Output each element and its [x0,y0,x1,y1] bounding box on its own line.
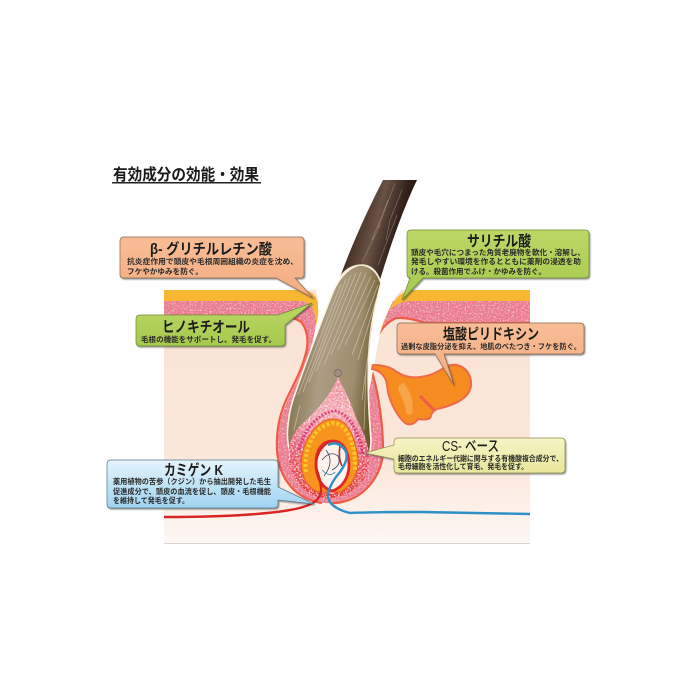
blood vessel: artery [164,441,330,517]
callout: カミゲンK [107,460,314,508]
follicle red outline [277,316,530,503]
capillaries [322,446,342,476]
hair root tan [287,265,381,465]
epidermis and follicle sheath [164,301,530,503]
callout: 塩酸ピリドキシン: 塩酸ピリドキシン [443,325,539,343]
callout: カミゲンK: カミゲン K [164,461,223,479]
callout: CS-ベース: CS- ベース [442,438,499,455]
callout: サリチル酸: ける。殺菌作用でふけ・かゆみを防ぐ。 [411,266,546,276]
magenta ring [299,411,363,455]
callout: サリチル酸 [402,230,589,300]
callout: β-グリチルレチン酸: 抗炎症作用で頭皮や毛根周囲組織の炎症を沈め、 [127,256,298,266]
panel bottom edge [164,543,530,544]
bulb tip knot [334,369,342,377]
callout: カミゲンK: 促進成分で、頭皮の血流を促し、頭皮・毛根機能 [113,486,271,496]
sebaceous gland [372,365,471,424]
hair bulb [289,377,369,498]
callout: カミゲンK: を維持して発毛を促す。 [113,495,189,505]
dermal papilla [316,441,349,491]
stratum corneum yellow right [380,290,530,334]
matrix orange ring [301,419,358,492]
hair root streaks [294,272,378,430]
callout: CS-ベース [365,438,565,473]
callout: β-グリチルレチン酸 [120,237,313,298]
callout: サリチル酸: 発毛しやすい環境を作るとともに薬剤の浸透を助 [411,256,581,266]
stratum corneum yellow left [164,290,318,326]
callout: ヒノキチオール: 毛根の機能をサポートし、発毛を促す。 [141,334,276,344]
dermis background [164,290,530,543]
callout: サリチル酸: サリチル酸 [467,232,531,250]
callout: サリチル酸: 頭皮や毛穴につまった角質老廃物を軟化・溶解し、 [411,247,585,257]
callout: β-グリチルレチン酸: β- グリチルレチン酸 [150,240,272,258]
callout: 塩酸ピリドキシン: 過剰な皮脂分泌を抑え、地肌のべたつき・フケを防ぐ。 [401,341,581,351]
callout: β-グリチルレチン酸: フケやかゆみを防ぐ。 [127,266,203,276]
callout: カミゲンK: 薬用植物の苦参（クジン）から抽出開発した毛生 [113,476,271,486]
callout: ヒノキチオール: ヒノキチオール [162,319,250,336]
callout: ヒノキチオール [136,303,312,346]
follicle opening [308,290,402,392]
callout: CS-ベース: 毛母細胞を活性化して育毛、発毛を促す。 [398,461,528,471]
title: 有効成分の効能・効果 [113,165,259,184]
skin cross-section panel [164,290,530,543]
blood vessel: vein [328,443,530,514]
callout: CS-ベース: 細胞のエネルギー代謝に関与する有機酸複合成分で、 [398,453,563,463]
hair follicle root and bulb [287,265,381,498]
hair shaft [340,180,417,280]
callout: 塩酸ピリドキシン [397,323,584,385]
